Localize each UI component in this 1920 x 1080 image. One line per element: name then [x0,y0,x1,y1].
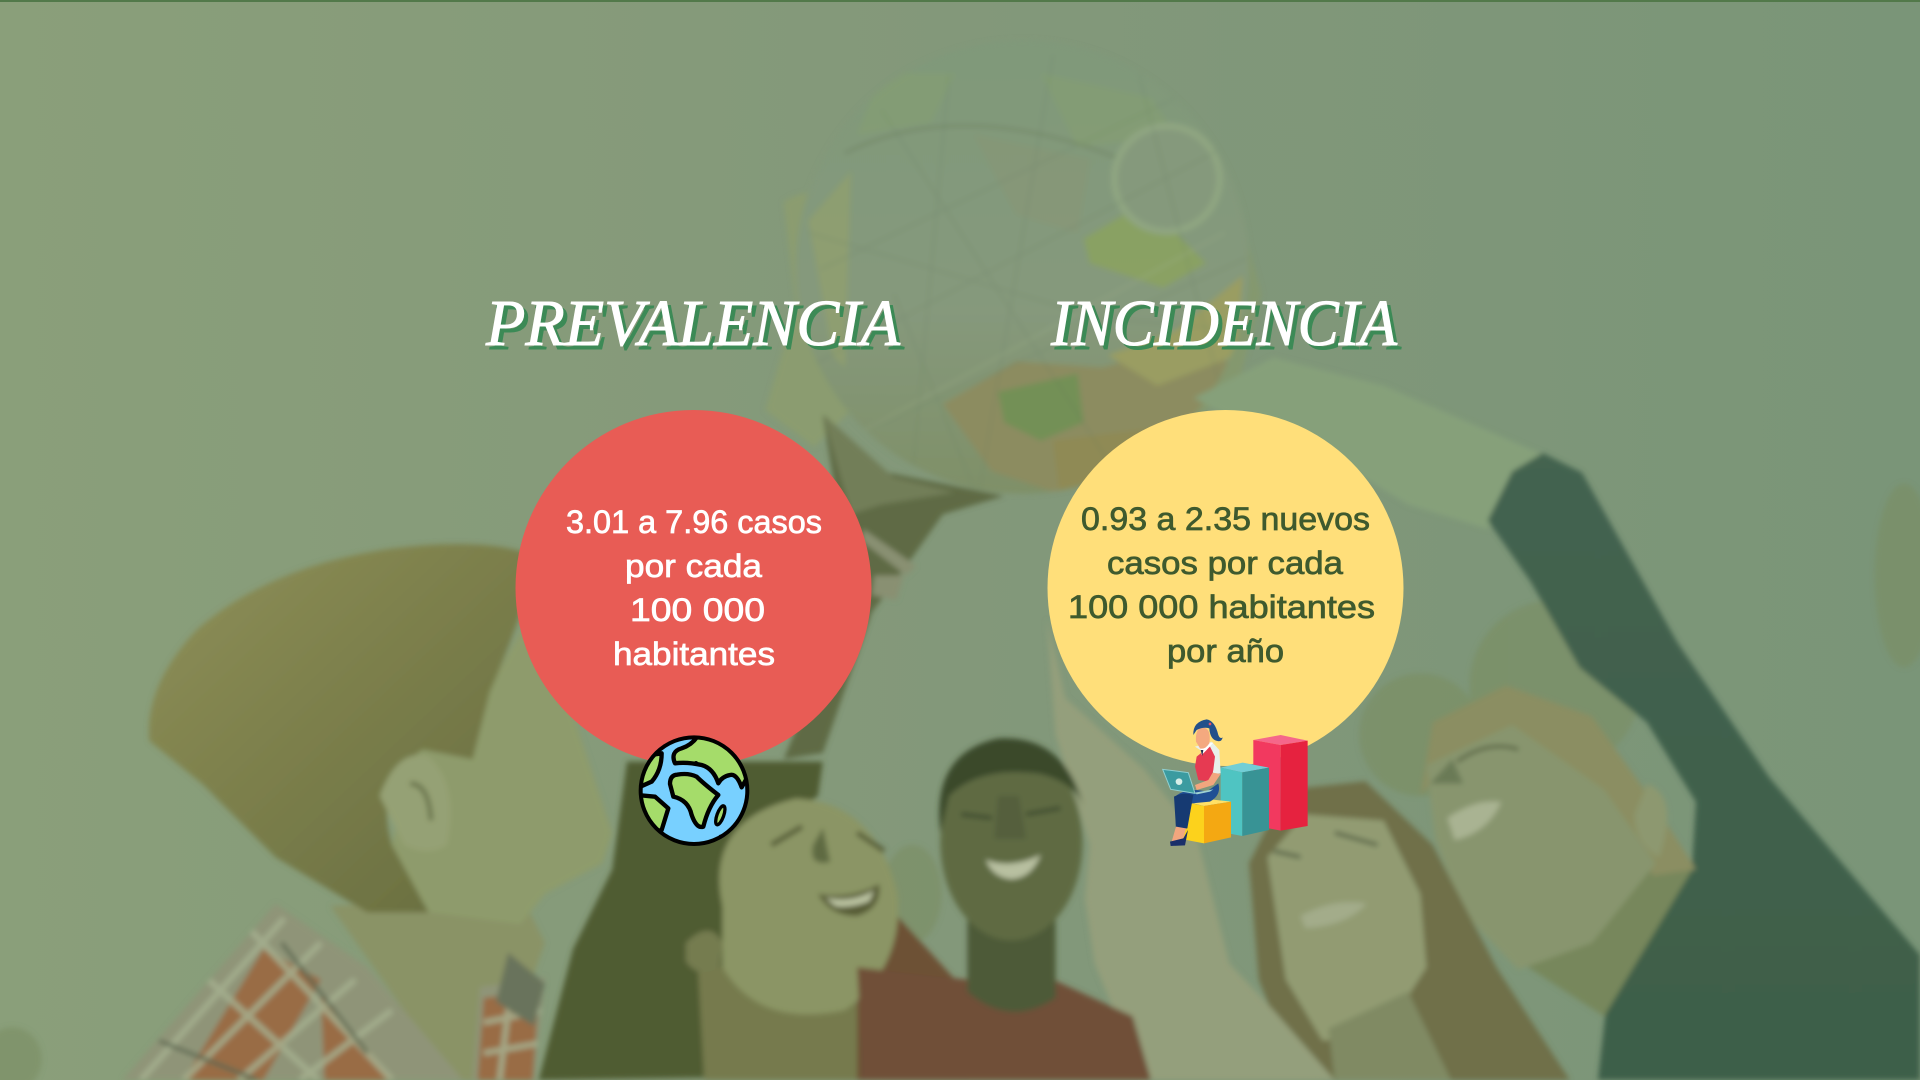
yellow bar [1183,799,1231,843]
raised arm with dark sleeve [1194,358,1920,1080]
incidencia figures [1068,501,1375,669]
prevalencia figures [566,504,822,672]
centre man [857,738,1151,1080]
panel: prevalencia [485,287,905,844]
panel: incidencia [1048,287,1404,846]
dark clothing behind centre woman [539,762,823,1080]
girl [1249,781,1570,1080]
centre woman [686,798,967,1080]
prevalencia figures: 100 000 [630,592,765,628]
prevalencia figures: habitantes [613,636,775,672]
incidencia figures: casos por cada [1107,545,1343,581]
prevalencia figures: 3.01 a 7.96 casos [566,504,822,540]
incidencia figures: por año [1167,633,1284,669]
incidencia figures: 0.93 a 2.35 nuevos [1081,501,1370,537]
hands holding the globe [784,414,1004,759]
icon: earth globe [633,737,753,844]
yellow circle [1048,410,1404,766]
incidencia figures: 100 000 habitantes [1068,589,1375,625]
beige jacket sleeve [1047,618,1335,1080]
trees [0,484,1920,1080]
heading: prevalencia: PREVALENCIA [485,287,901,360]
globe photo [768,122,1260,494]
heading: incidencia: INCIDENCIA [1050,287,1398,360]
icon: woman with laptop on bar chart [1163,719,1308,846]
red circle [516,410,872,766]
prevalencia figures: por cada [625,548,762,584]
teal bar [1221,763,1269,836]
heading: prevalencia: PREVALENCIA [489,291,905,364]
man with plaid shirt [110,544,612,1080]
boy on the right [1420,686,1696,1016]
woman figure [1163,719,1223,846]
red bar [1253,735,1308,831]
heading: incidencia: INCIDENCIA [1054,291,1402,364]
